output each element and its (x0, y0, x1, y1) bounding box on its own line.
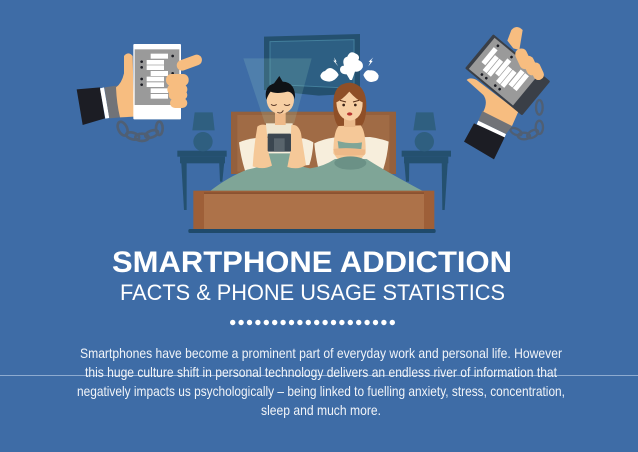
intro paragraph: sleep and much more. (261, 402, 381, 418)
horizontal line (0, 375, 638, 376)
right palm (467, 78, 518, 126)
right fingers (507, 27, 546, 82)
icon: right hand holding phone (464, 27, 550, 159)
intro paragraph: this huge culture shift in personal technology delivers an endless river of information that (85, 364, 557, 380)
left sleeve (77, 87, 105, 125)
left lamp (192, 112, 215, 151)
man phone (268, 134, 291, 152)
pillows (239, 137, 389, 171)
left phone (133, 44, 181, 119)
right sleeve (464, 123, 505, 159)
man right arm (287, 125, 306, 168)
bed frame (188, 191, 436, 233)
man neck (275, 112, 286, 125)
icon: left hand holding phone (77, 44, 197, 141)
woman hair (333, 83, 366, 126)
woman (333, 83, 366, 160)
left chain (116, 120, 163, 141)
left fingers (166, 60, 197, 108)
dotted divider (230, 320, 395, 325)
right phone (465, 34, 550, 116)
woman eyes and mouth (340, 100, 359, 116)
subtitle: FACTS & PHONE USAGE STATISTICS (120, 280, 505, 305)
left nightstand (177, 151, 227, 210)
man (253, 76, 306, 168)
picture frame (264, 34, 360, 96)
light beam (243, 58, 312, 124)
man chest (266, 123, 293, 137)
right nightstand (402, 151, 451, 210)
title: SMARTPHONE ADDICTION (112, 246, 512, 279)
right shirt cuff (477, 121, 506, 137)
woman face (336, 92, 363, 121)
man head (267, 86, 294, 114)
intro paragraph: negatively impacts us psychologically – being linked to fuelling anxiety, stress, concentration, (77, 383, 565, 399)
man left arm (253, 125, 272, 168)
left handcuff (104, 86, 120, 118)
left shirt cuff (100, 87, 109, 119)
left palm (116, 53, 134, 117)
woman neck (344, 115, 355, 127)
headboard (231, 112, 396, 174)
man hair (266, 76, 295, 100)
woman crossed arms (333, 148, 365, 156)
right handcuff (478, 111, 512, 134)
man eyes and mouth (271, 104, 290, 113)
blanket (209, 153, 424, 192)
right chain (509, 100, 543, 140)
illustration: couple in bed (177, 34, 451, 233)
icon: anger smoke (320, 52, 379, 82)
intro paragraph: Smartphones have become a prominent part of everyday work and personal life. However (80, 345, 562, 361)
woman body (333, 125, 366, 160)
woman top (338, 141, 362, 149)
blanket fold (334, 156, 366, 170)
intro paragraph (77, 345, 565, 418)
right lamp (413, 112, 436, 151)
